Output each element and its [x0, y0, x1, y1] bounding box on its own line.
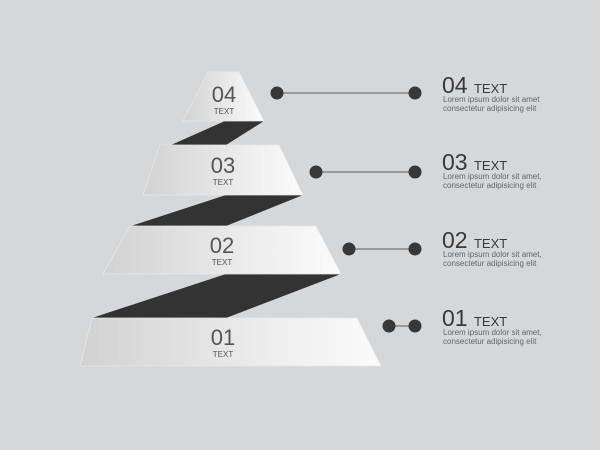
label 01: 01 TEXT — [442, 305, 507, 331]
connector 04 — [270, 86, 422, 100]
label 03 — [442, 149, 542, 190]
label 04: Lorem ipsum dolor sit amet — [443, 95, 540, 104]
label 02: Lorem ipsum dolor sit amet, — [443, 250, 542, 259]
tier 02 — [103, 226, 341, 274]
connector 01 — [382, 320, 422, 332]
label 04: consectetur adipisicing elit — [443, 104, 537, 113]
tier 01: TEXT — [213, 350, 233, 359]
tier 03 — [143, 145, 303, 195]
shadow: 2-1 — [92, 274, 341, 318]
shadow: 4-3 — [171, 121, 264, 145]
label 01: Lorem ipsum dolor sit amet, — [443, 328, 542, 337]
tier 04: TEXT — [214, 107, 234, 116]
label 02: 02 TEXT — [442, 227, 507, 253]
tier 02: 02 — [210, 233, 234, 258]
tier 03: TEXT — [213, 178, 233, 187]
label 03: 03 TEXT — [442, 149, 507, 175]
tier 04 — [183, 72, 264, 121]
connector 02 — [342, 242, 422, 256]
label 02: consectetur adipisicing elit — [443, 259, 537, 268]
tier 02: TEXT — [212, 258, 232, 267]
label 01: consectetur adipisicing elit — [443, 337, 537, 346]
label 04 — [442, 72, 540, 113]
tier 03: 03 — [211, 153, 235, 178]
tier 01 — [80, 318, 381, 366]
tier 01: 01 — [211, 325, 235, 350]
label 01 — [442, 305, 542, 346]
pyramid — [80, 72, 381, 366]
shadow: 3-2 — [131, 195, 303, 226]
tier 04: 04 — [212, 82, 236, 107]
label 03: Lorem ipsum dolor sit amet, — [443, 172, 542, 181]
label 02 — [442, 227, 542, 268]
connector 03 — [310, 166, 422, 178]
label 03: consectetur adipisicing elit — [443, 181, 537, 190]
label 04: 04 TEXT — [442, 72, 507, 98]
